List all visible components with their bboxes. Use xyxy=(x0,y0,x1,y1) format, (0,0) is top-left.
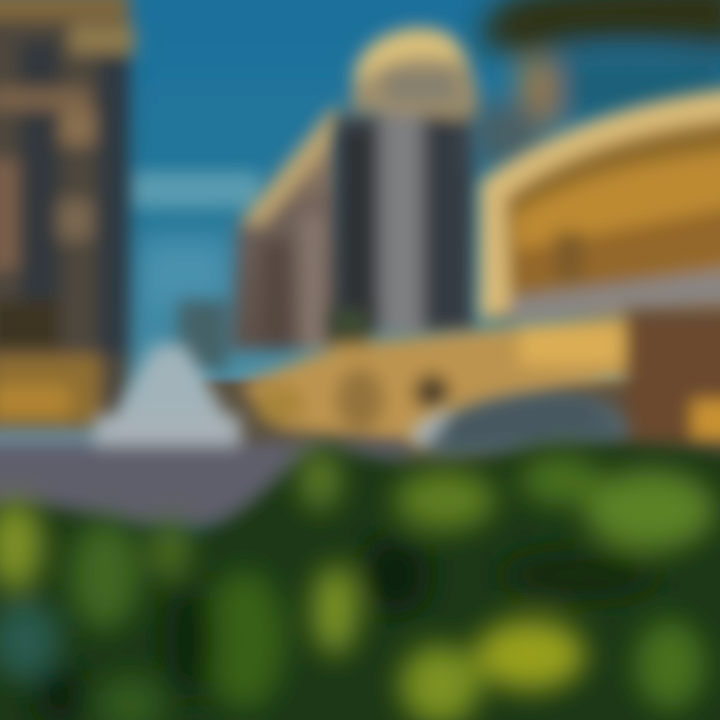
building: low tan block xyxy=(178,105,350,370)
foliage: bottom hedge xyxy=(0,443,720,720)
sky xyxy=(0,0,720,460)
building: golden ground floor xyxy=(240,310,720,445)
building: left tower xyxy=(0,0,135,430)
car xyxy=(410,391,632,462)
building: golden right hall xyxy=(480,88,720,325)
street base xyxy=(200,380,720,480)
building: central tower xyxy=(335,28,482,335)
foliage and building: top right xyxy=(475,0,720,165)
road xyxy=(0,345,410,532)
